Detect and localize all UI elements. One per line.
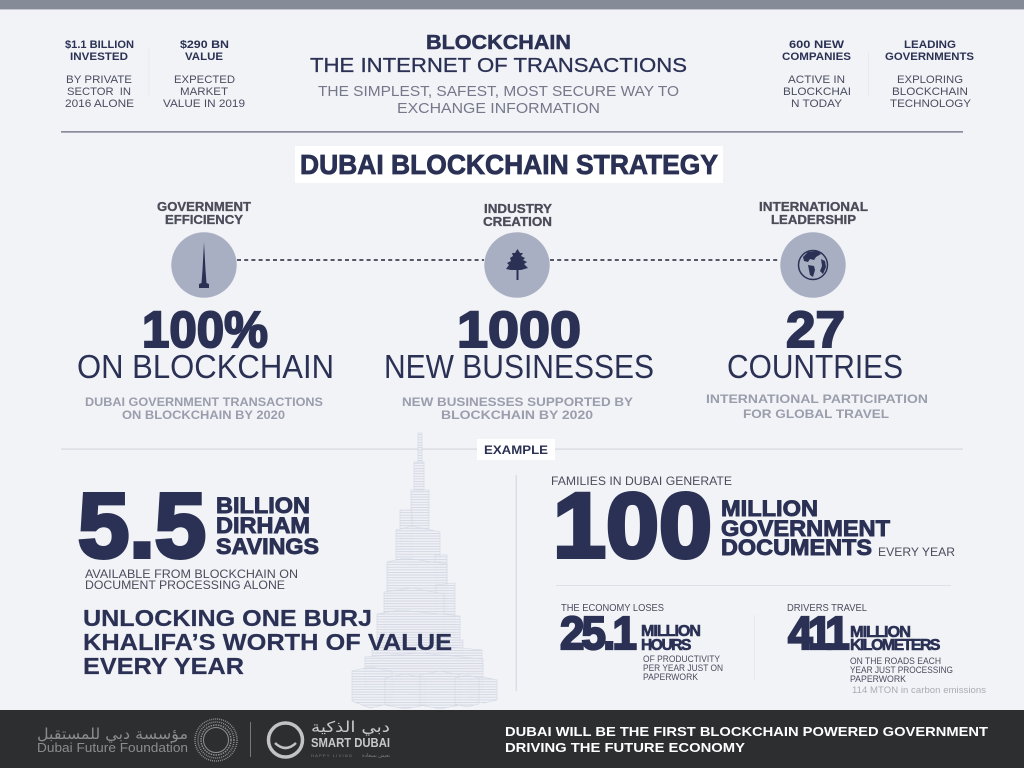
panel: government efficiency: EFFICIENCY	[165, 213, 244, 227]
heading: Dubai Blockchain Strategy: DUBAI BLOCKCHAIN STRATEGY	[300, 149, 718, 180]
stat: 25.1 million hours: PER YEAR JUST ON	[643, 663, 723, 673]
stat: $290 bn value: EXPECTED	[174, 74, 235, 86]
panel: industry creation: 1000	[457, 301, 581, 358]
stat: 100 million government documents: DOCUMENTS	[721, 535, 872, 560]
subtitle: EXCHANGE INFORMATION	[397, 100, 600, 117]
logo: Smart Dubai: نعيش بسعادة	[362, 753, 390, 759]
stat: 25.1 million hours: PAPERWORK	[643, 672, 698, 682]
logo: Smart Dubai	[268, 718, 390, 759]
stat: 25.1 million hours: 25.1	[560, 607, 636, 659]
label: example	[477, 439, 555, 460]
stat: leading governments: TECHNOLOGY	[890, 98, 972, 110]
panel: government efficiency: ON BLOCKCHAIN BY 2020	[122, 408, 285, 422]
panel: international leadership: 27	[786, 301, 845, 358]
title: THE INTERNET OF TRANSACTIONS	[310, 54, 687, 77]
title	[310, 32, 687, 77]
stat: 100 million government documents: EVERY YEAR	[878, 545, 955, 559]
stat: $290 bn value: $290 BN	[180, 39, 229, 51]
logo: Dubai Future Foundation: Dubai Future Foundation	[37, 740, 188, 755]
callout: one Burj Khalifa of value: KHALIFA’S WORTH OF VALUE	[83, 629, 452, 655]
stat: $290 bn value: VALUE IN 2019	[163, 98, 245, 110]
panel: international leadership: INTERNATIONAL	[759, 200, 868, 214]
stat: 5.5 billion dirham savings: SAVINGS	[216, 534, 319, 559]
stat: leading governments: GOVERNMENTS	[885, 51, 974, 63]
dotted connector	[237, 259, 780, 261]
stat: $290 bn value	[163, 39, 245, 110]
stat: 5.5 billion dirham savings: DIRHAM	[216, 513, 310, 538]
stat: 100 million government documents: GOVERNMENT	[721, 516, 891, 541]
subtitle: THE SIMPLEST, SAFEST, MOST SECURE WAY TO	[318, 83, 679, 100]
panel: government efficiency: DUBAI GOVERNMENT TRANSACTIONS	[85, 395, 323, 409]
title: BLOCKCHAIN	[426, 32, 571, 54]
panel: government efficiency: GOVERNMENT	[157, 200, 251, 214]
top band	[0, 0, 1024, 10]
logo: Dubai Future Foundation: مؤسسة دبي للمستقبل	[37, 725, 188, 744]
callout: one Burj Khalifa of value	[83, 605, 452, 679]
stat: 600 new companies: ACTIVE IN	[788, 74, 845, 86]
stat: 25.1 million hours: THE ECONOMY LOSES	[561, 603, 664, 614]
stat: 411 million kilometers: MILLION	[850, 624, 910, 641]
icon: tree	[484, 232, 550, 298]
panel: industry creation: BLOCKCHAIN BY 2020	[441, 408, 593, 422]
stat: 411 million kilometers: KILOMETERS	[850, 637, 941, 654]
stat: 5.5 billion dirham savings	[78, 475, 319, 592]
stat: 25.1 million hours	[560, 603, 723, 682]
footer statement: DRIVING THE FUTURE ECONOMY	[505, 741, 746, 755]
stat: 5.5 billion dirham savings: 5.5	[78, 475, 206, 577]
logo: Smart Dubai: SMART DUBAI	[311, 736, 390, 750]
label: example: EXAMPLE	[484, 443, 548, 457]
logo: Dubai Future Foundation	[37, 719, 237, 761]
panel: international leadership: COUNTRIES	[727, 348, 903, 385]
stat: $290 bn value: MARKET	[180, 86, 228, 98]
stat: 5.5 billion dirham savings: BILLION	[216, 493, 310, 518]
stat: 600 new companies: 600 NEW	[789, 39, 845, 51]
panel: industry creation: NEW BUSINESSES	[384, 348, 654, 385]
stat: 411 million kilometers: DRIVERS TRAVEL	[787, 603, 867, 614]
stat: 100 million government documents: 100	[553, 475, 712, 577]
icon: globe	[780, 232, 846, 298]
stat: 25.1 million hours: OF PRODUCTIVITY	[643, 654, 720, 664]
subtitle	[318, 83, 679, 117]
stat: 25.1 million hours: HOURS	[641, 637, 692, 654]
stat: $1.1 billion invested: INVESTED	[70, 51, 128, 63]
stat: 600 new companies: COMPANIES	[782, 51, 851, 63]
stat: $1.1 billion invested: BY PRIVATE	[66, 74, 132, 86]
stat: $290 bn value: VALUE	[185, 51, 223, 63]
panel: government efficiency: 100%	[142, 301, 268, 358]
stat: 600 new companies	[782, 39, 851, 110]
stat: leading governments: LEADING	[904, 39, 956, 51]
logo: Smart Dubai: HAPPY LIVING	[311, 753, 352, 758]
stat: 411 million kilometers: PAPERWORK	[850, 674, 906, 684]
callout: one Burj Khalifa of value: UNLOCKING ONE BURJ	[83, 605, 372, 631]
panel: industry creation	[384, 202, 654, 422]
stat: 600 new companies: N TODAY	[791, 98, 843, 110]
panel: international leadership: FOR GLOBAL TRAVEL	[743, 407, 889, 421]
panel: international leadership: LEADERSHIP	[771, 213, 856, 227]
stat: 411 million kilometers: 411	[788, 607, 849, 659]
stat: 411 million kilometers: ON THE ROADS EACH	[850, 656, 941, 666]
stat: leading governments	[885, 39, 974, 110]
footer statement: DUBAI WILL BE THE FIRST BLOCKCHAIN POWERED GOVERNMENT	[505, 725, 988, 739]
panel: international leadership: INTERNATIONAL PARTICIPATION	[706, 392, 928, 406]
illustration: Burj Khalifa built from paper stacks	[352, 433, 497, 709]
stat: 100 million government documents	[551, 474, 955, 577]
stat: $1.1 billion invested: SECTOR IN	[67, 86, 131, 98]
stat: $1.1 billion invested: $1.1 BILLION	[65, 39, 134, 51]
stat: $1.1 billion invested: 2016 ALONE	[65, 98, 134, 110]
footer band	[0, 710, 1024, 768]
stat: 100 million government documents: FAMILIES IN DUBAI GENERATE	[551, 474, 732, 488]
stat: 411 million kilometers: 114 MTON in carbon emissions	[852, 685, 986, 696]
stat: 5.5 billion dirham savings: DOCUMENT PROCESSING ALONE	[85, 578, 285, 592]
stat: leading governments: EXPLORING	[897, 74, 963, 86]
logo: Smart Dubai: دبي الذكية	[311, 718, 390, 737]
stat: leading governments: BLOCKCHAIN	[892, 86, 968, 98]
stat: 5.5 billion dirham savings: AVAILABLE FROM BLOCKCHAIN ON	[85, 567, 298, 581]
icon: Burj Khalifa tower	[171, 232, 237, 298]
panel: government efficiency: ON BLOCKCHAIN	[77, 348, 334, 385]
stat: 100 million government documents: MILLION	[721, 496, 818, 521]
panel: industry creation: CREATION	[483, 215, 552, 229]
panel: industry creation: NEW BUSINESSES SUPPORTED BY	[402, 395, 633, 409]
stat: 411 million kilometers: YEAR JUST PROCESSING	[850, 665, 953, 675]
stat: 411 million kilometers	[787, 603, 986, 696]
panel: government efficiency	[77, 200, 334, 422]
stat: $1.1 billion invested	[65, 39, 134, 110]
stat: 600 new companies: BLOCKCHAI	[783, 86, 851, 98]
callout: one Burj Khalifa of value: EVERY YEAR	[83, 653, 244, 679]
panel: industry creation: INDUSTRY	[484, 202, 553, 216]
stat: 25.1 million hours: MILLION	[641, 623, 700, 640]
panel: international leadership	[706, 200, 928, 421]
footer statement	[505, 725, 988, 755]
